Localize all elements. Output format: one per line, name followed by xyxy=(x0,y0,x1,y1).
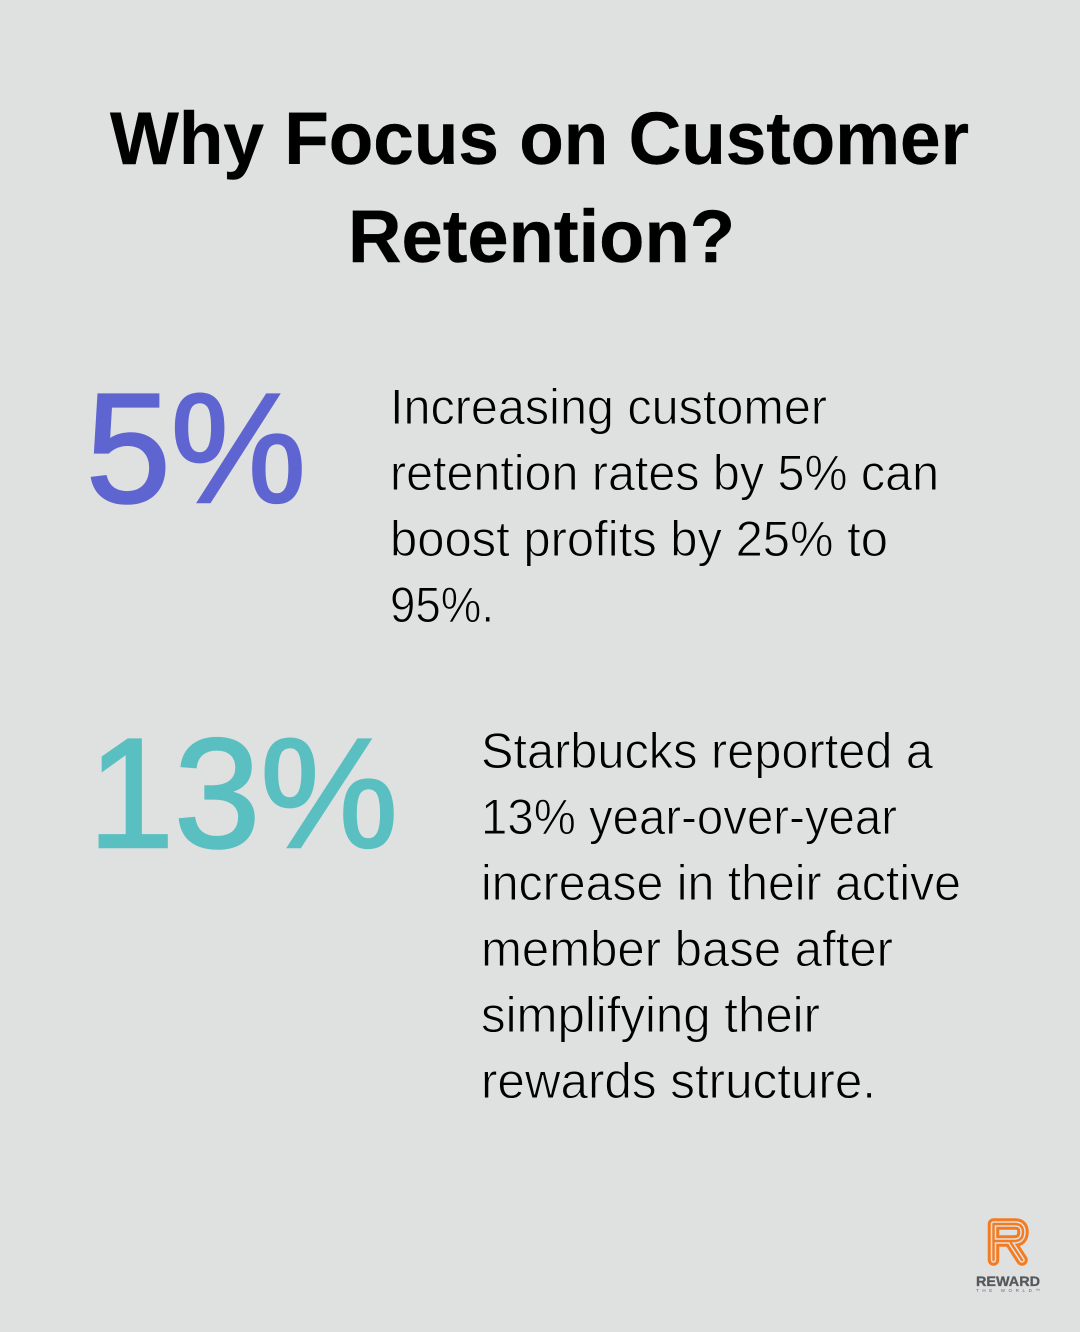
panel: 5% statistic xyxy=(86,362,939,633)
text block: Starbucks: Starbucks reported a xyxy=(481,723,933,779)
big number: 13%: 13% xyxy=(88,707,398,881)
text block: retention profits xyxy=(390,379,939,633)
text block: Starbucks: rewards structure. xyxy=(481,1053,876,1109)
title: Retention? xyxy=(348,195,735,278)
icon: orange R xyxy=(994,1224,1023,1260)
text block: retention profits: Increasing customer xyxy=(390,379,827,435)
logo: Reward the World xyxy=(976,1224,1040,1293)
title: Why Focus on Customer xyxy=(110,97,969,180)
text block: Starbucks: simplifying their xyxy=(481,987,820,1043)
text block: retention profits: boost profits by 25% to xyxy=(390,511,888,567)
text block: retention profits: 95%. xyxy=(390,577,494,633)
text block: Starbucks: member base after xyxy=(481,921,893,977)
text block: Starbucks: 13% year-over-year xyxy=(481,789,897,845)
panel: 13% statistic xyxy=(88,707,961,1109)
title xyxy=(110,97,969,278)
big number: 5%: 5% xyxy=(86,362,306,536)
text block: retention profits: retention rates by 5% can xyxy=(390,445,939,501)
logo tagline: THE WORLD™ xyxy=(976,1288,1040,1293)
text block: Starbucks xyxy=(481,723,961,1109)
text block: Starbucks: increase in their active xyxy=(481,855,961,911)
logo wordmark: REWARD xyxy=(976,1273,1040,1289)
